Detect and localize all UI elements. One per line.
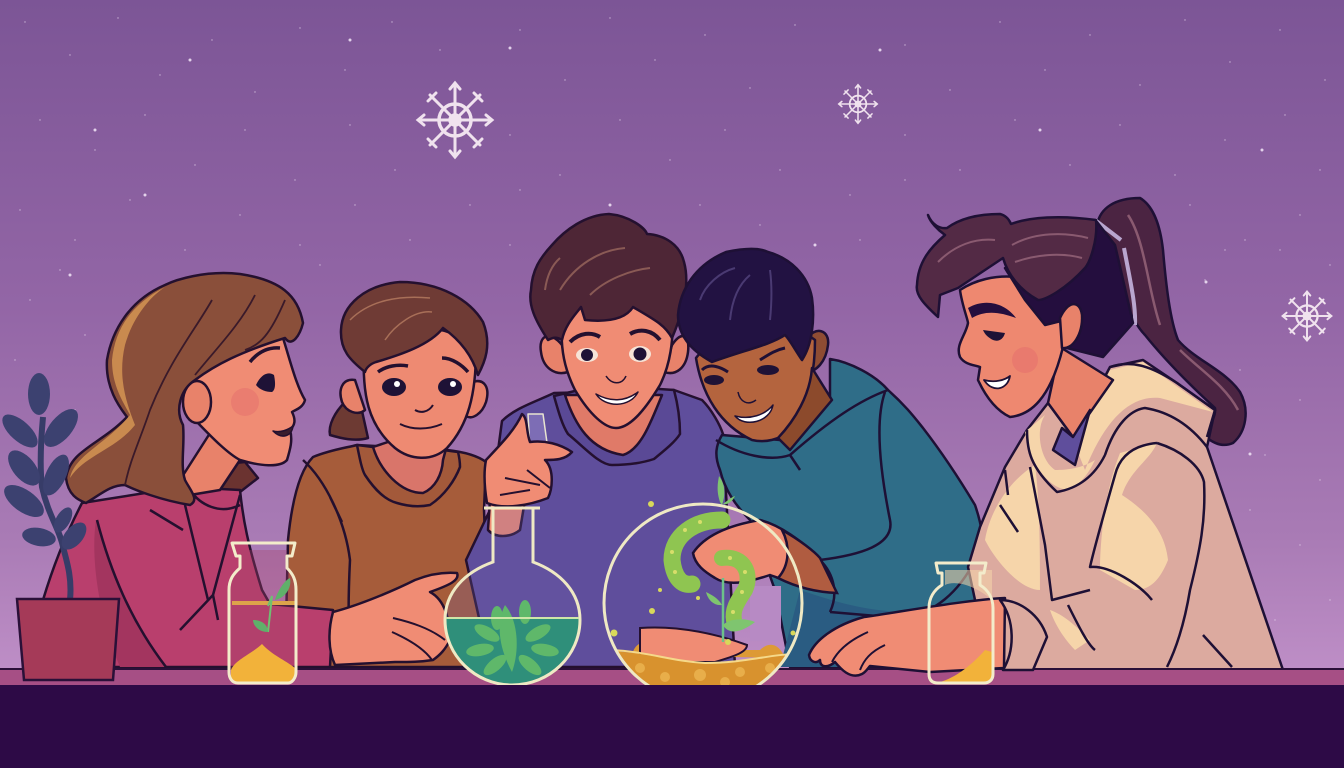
snowflake icon: small centre bbox=[839, 85, 877, 123]
purple sweater bbox=[466, 390, 735, 667]
soil bbox=[618, 652, 786, 685]
sprout bbox=[722, 578, 724, 642]
table bbox=[0, 668, 1344, 685]
hair behind neck bbox=[205, 462, 258, 492]
hoodie cuff bbox=[1000, 600, 1047, 670]
face bbox=[959, 276, 1075, 417]
pink sweater bbox=[43, 487, 333, 667]
fringe and swept hair bbox=[917, 214, 1096, 317]
ear left and right bbox=[341, 380, 487, 417]
neck bbox=[1048, 347, 1113, 437]
child: boy in brown sweater bbox=[285, 282, 490, 667]
face details bbox=[968, 303, 1016, 318]
brown hand reaching into the globe bbox=[693, 520, 835, 592]
teal hoodie bbox=[716, 359, 985, 667]
collar bbox=[554, 385, 680, 465]
ear bbox=[1060, 304, 1082, 348]
table front bbox=[0, 685, 1344, 768]
right glass jar bbox=[929, 563, 993, 683]
plant pot bbox=[17, 599, 119, 680]
face details bbox=[702, 348, 785, 372]
ponytail bbox=[1097, 198, 1246, 445]
starfield bbox=[15, 18, 1330, 620]
ear bbox=[806, 331, 828, 372]
brown sweater bbox=[285, 445, 490, 667]
ear and face bbox=[190, 338, 305, 465]
face bbox=[562, 297, 672, 428]
child: boy in purple sweater bbox=[466, 214, 735, 667]
glass globe with orange soil and sprout bbox=[600, 476, 837, 702]
face details bbox=[250, 348, 280, 362]
pigtail bbox=[330, 402, 368, 440]
ears bbox=[541, 336, 688, 373]
hair bbox=[66, 273, 303, 505]
face details bbox=[378, 358, 468, 372]
hood fold bbox=[716, 390, 975, 618]
hand holding small glass vial bbox=[485, 414, 572, 536]
neck bbox=[373, 438, 447, 493]
hand on the table bbox=[329, 573, 458, 665]
face bbox=[364, 328, 476, 458]
child: girl in pink sweater bbox=[43, 273, 458, 667]
left glass jar bbox=[229, 543, 296, 683]
neck bbox=[180, 430, 240, 495]
sweater collar bbox=[357, 445, 460, 506]
lilac gap and lower hand bbox=[754, 586, 781, 628]
round flask with green plant bbox=[440, 500, 585, 688]
hoodie body bbox=[968, 360, 1283, 670]
sprouting leaves bbox=[465, 600, 560, 679]
snowflake icon: large bbox=[418, 83, 492, 157]
light patches bbox=[985, 362, 1213, 650]
child: girl in cream hoodie with ponytail bbox=[917, 198, 1283, 670]
hair bbox=[530, 214, 686, 340]
green curled foliage over the hand bbox=[722, 558, 748, 620]
child: boy in teal hoodie bbox=[678, 249, 985, 667]
plant bbox=[0, 373, 91, 600]
green curled foliage behind the hand bbox=[672, 520, 722, 584]
neck bbox=[778, 368, 832, 450]
face details bbox=[570, 331, 660, 342]
under hair bbox=[1005, 222, 1133, 357]
snowflake icon: right bbox=[1283, 292, 1331, 340]
reaching hand and cuff of the cream hoodie girl bbox=[809, 598, 1047, 676]
hair band bbox=[1095, 220, 1135, 325]
neck bbox=[565, 395, 662, 455]
floating seeds bbox=[610, 501, 796, 645]
hair bbox=[678, 249, 813, 362]
face bbox=[696, 328, 815, 441]
hoodie lines bbox=[1000, 364, 1232, 667]
hair bbox=[341, 282, 487, 375]
